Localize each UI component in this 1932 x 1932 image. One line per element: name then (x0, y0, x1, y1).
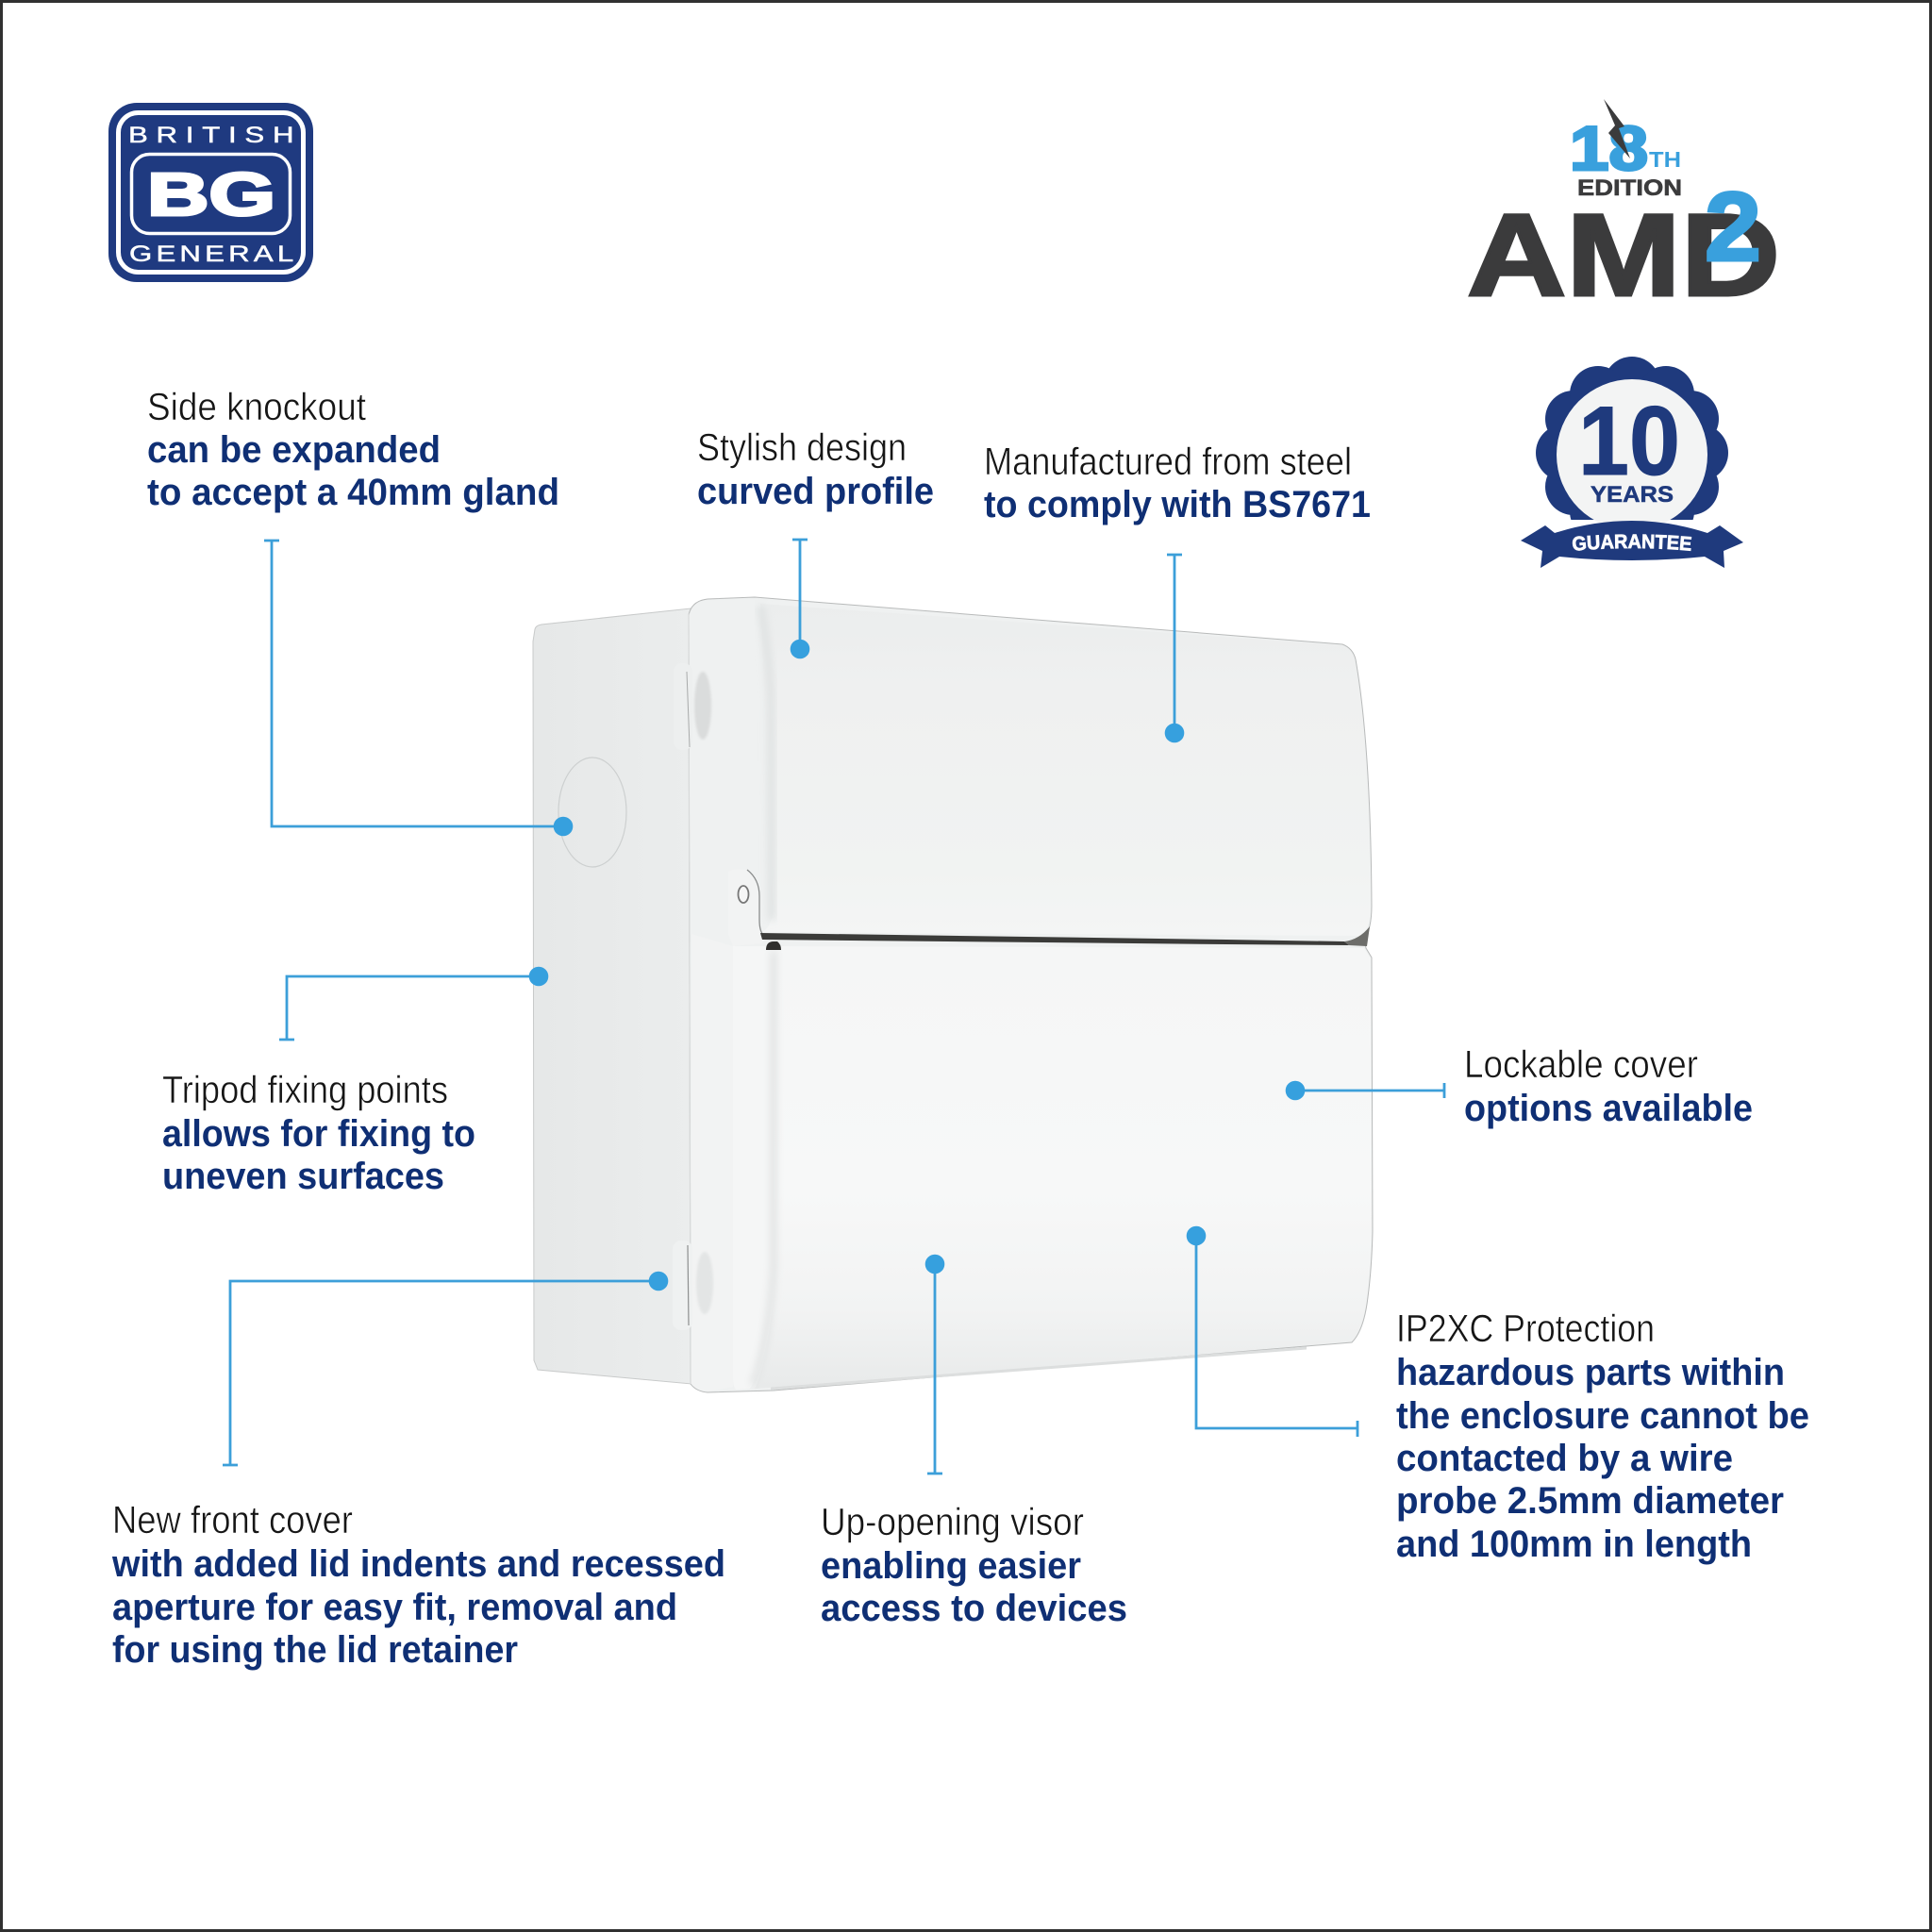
slot: top (674, 663, 711, 750)
text: aperture for easy fit, removal and (112, 1587, 677, 1628)
text: can be expanded (147, 429, 441, 471)
logo: 18th Edition AMD2: AMD (1467, 191, 1780, 321)
front body (689, 597, 1373, 1392)
logo: 18th Edition AMD2: EDITION (1577, 175, 1682, 201)
text (1396, 1307, 1809, 1565)
text: with added lid indents and recessed (111, 1543, 725, 1585)
leader line (925, 1255, 944, 1474)
logo: 18th Edition AMD2: 18 (1570, 113, 1648, 183)
text: the enclosure cannot be (1396, 1395, 1809, 1437)
text: contacted by a wire (1396, 1438, 1733, 1479)
leader line (1165, 555, 1184, 742)
text: Lockable cover (1464, 1042, 1698, 1086)
text: uneven surfaces (162, 1156, 444, 1197)
callout: IP2XC protection (1187, 1226, 1809, 1565)
text: and 100mm in length (1396, 1524, 1752, 1565)
gap right end (1344, 926, 1370, 946)
text: Manufactured from steel (984, 440, 1352, 483)
leader line (1286, 1081, 1444, 1100)
text (111, 1498, 725, 1671)
badge: 10 years guarantee: 10 (1578, 387, 1680, 496)
logo: 18th Edition AMD2: 2 (1705, 173, 1761, 282)
product: metal consumer unit (533, 597, 1373, 1392)
text: access to devices (821, 1588, 1127, 1629)
lower left strip (733, 946, 774, 1390)
notch (766, 941, 781, 950)
text (147, 385, 559, 513)
text (1464, 1042, 1753, 1129)
logo: British General: GENERAL (129, 241, 293, 266)
text: enabling easier (821, 1545, 1081, 1587)
text: to comply with BS7671 (984, 484, 1371, 525)
text: options available (1464, 1088, 1753, 1129)
text (162, 1068, 475, 1197)
text: curved profile (697, 471, 934, 512)
callout: stylish design (697, 425, 934, 658)
crease shadows (760, 606, 772, 920)
badge: 10 years guarantee: GUARANTEE (1572, 534, 1692, 551)
slot: bottom (673, 1241, 713, 1330)
badge: 10 years guarantee: YEARS (1591, 482, 1674, 508)
logo: British General (108, 103, 313, 282)
text: Up-opening visor (821, 1500, 1084, 1543)
gap between covers (760, 933, 1349, 945)
bottom lip (771, 1348, 1307, 1389)
text: probe 2.5mm diameter (1396, 1480, 1784, 1522)
leader line (791, 540, 809, 658)
callout: lockable cover (1286, 1042, 1753, 1129)
hinge (728, 869, 766, 946)
text (697, 425, 934, 512)
leader line (223, 1272, 668, 1465)
knockout circle (558, 758, 626, 867)
text (821, 1500, 1127, 1629)
upper cover (760, 604, 1371, 936)
callout: manufactured from steel (984, 440, 1371, 742)
leader line (1187, 1226, 1357, 1437)
lower cover (755, 946, 1372, 1389)
logo: 18th Edition AMD2 (1467, 99, 1780, 321)
callout: side knockout (147, 385, 573, 836)
callout: tripod fixing points (162, 967, 548, 1197)
text: Tripod fixing points (162, 1068, 448, 1111)
side panel (533, 608, 691, 1384)
text (984, 440, 1371, 525)
badge: 10 years guarantee (1521, 357, 1743, 568)
text: Side knockout (147, 385, 367, 428)
text: IP2XC Protection (1396, 1307, 1655, 1350)
text: for using the lid retainer (112, 1629, 518, 1671)
callout: up-opening visor (821, 1255, 1127, 1629)
callout: new front cover (111, 1272, 725, 1671)
text: New front cover (112, 1498, 353, 1541)
logo: British General: BG (147, 160, 275, 228)
text: to accept a 40mm gland (147, 472, 559, 513)
logo: British General: BRITISH (128, 122, 293, 147)
seams (689, 613, 691, 1384)
text: Stylish design (697, 425, 907, 469)
leader line (279, 967, 548, 1040)
text: allows for fixing to (162, 1113, 475, 1155)
text: hazardous parts within (1396, 1352, 1785, 1393)
leader line (264, 541, 573, 836)
logo: 18th Edition AMD2: TH (1649, 147, 1681, 172)
